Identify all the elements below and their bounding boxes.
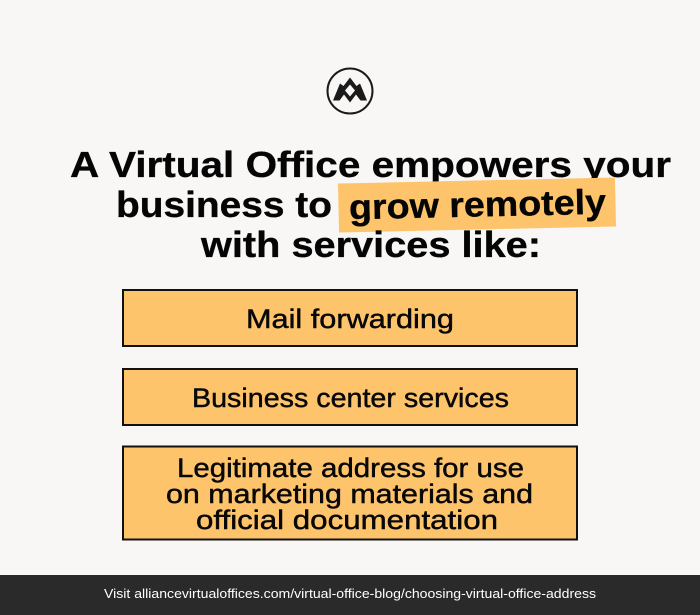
footer bar (0, 575, 700, 615)
service box: mail forwarding (123, 290, 577, 346)
icon: logo (328, 68, 372, 114)
service box: legitimate address: on marketing materials and (166, 479, 533, 509)
service box: legitimate address (123, 446, 577, 540)
heading: A Virtual Office empowers your (70, 144, 671, 185)
heading (70, 144, 671, 265)
highlight: grow remotely (338, 177, 616, 233)
heading: business to (116, 184, 332, 225)
footer bar: Visit alliancevirtualoffices.com/virtual-office-blog/choosing-virtual-office-address (104, 586, 597, 601)
service box: legitimate address: Legitimate address for use (177, 453, 524, 483)
service box: business center services: Business center services (192, 383, 509, 413)
service box: mail forwarding: Mail forwarding (246, 304, 454, 334)
highlight: grow remotely: grow remotely (349, 183, 607, 227)
service box: legitimate address: official documentation (196, 505, 498, 535)
service box: business center services (123, 369, 577, 425)
heading: with services like: (200, 224, 541, 265)
